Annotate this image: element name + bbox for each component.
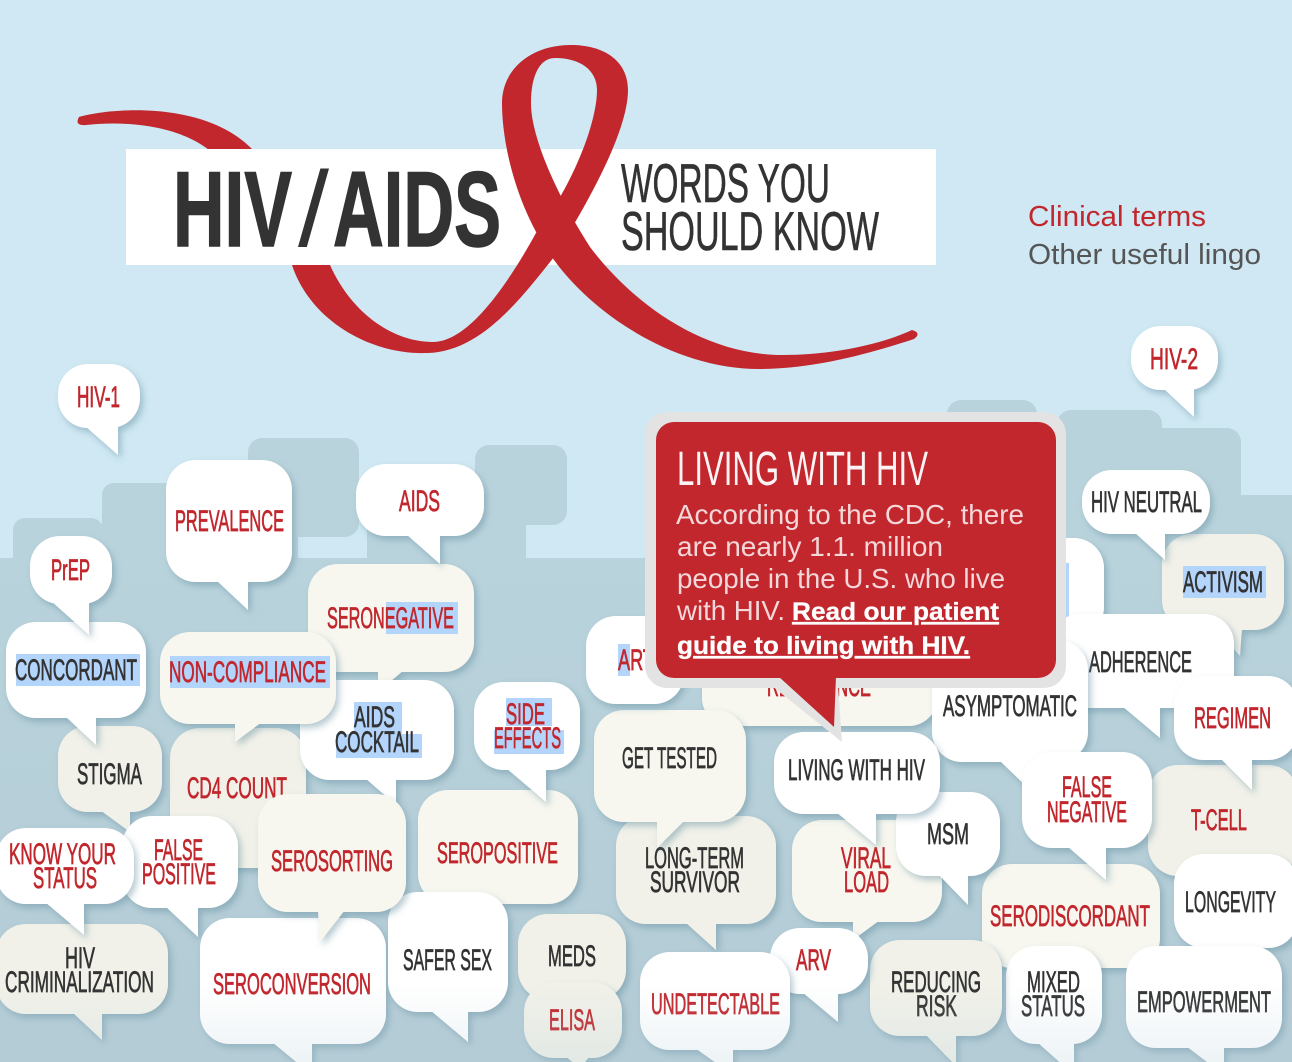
bubble: hidden term behind callout	[1000, 538, 1104, 637]
callout heading: LIVING WITH HIV	[677, 443, 928, 496]
bubble: living with HIV	[774, 732, 940, 845]
bubble: reducing risk	[870, 940, 1002, 1062]
bubble: seronegative: SERONEGATIVE	[327, 602, 454, 635]
bubble: ARV	[770, 928, 868, 1022]
background skyline	[0, 400, 1292, 1062]
bubble: ELISA: ELISA	[549, 1004, 595, 1037]
ribbon loop and lower left strand	[292, 45, 628, 353]
bubble: serodiscordant: SERODISCORDANT	[990, 900, 1150, 933]
bubble: adherence	[1050, 614, 1234, 738]
bubble: false negative: NEGATIVE	[1047, 796, 1127, 829]
bubble: serosorting: SEROSORTING	[271, 845, 393, 878]
bubble: mixed status	[1006, 946, 1102, 1062]
bubble: HIV-1	[58, 364, 140, 455]
bubble: long-term survivor: LONG-TERM	[645, 842, 744, 875]
bubble: HIV-2: HIV-2	[1150, 343, 1198, 376]
bubble: asymptomatic	[932, 640, 1088, 790]
callout frame and tail	[645, 412, 1066, 742]
bubble: concordant: CONCORDANT	[15, 654, 137, 687]
bubble: asymptomatic: ASYMPTOMATIC	[943, 690, 1077, 723]
bubble: get tested: GET TESTED	[622, 742, 717, 775]
bubble: HIV-2	[1131, 326, 1218, 417]
bubble: false negative	[1022, 752, 1152, 880]
callout body text	[676, 499, 1024, 626]
bubble: serosorting	[258, 794, 406, 942]
callout body text: According to the CDC, there	[676, 499, 1024, 530]
bubble: living with HIV: LIVING WITH HIV	[788, 754, 925, 787]
bubble: side effects: SIDE	[506, 698, 545, 731]
bubble: seroconversion: SEROCONVERSION	[213, 968, 371, 1001]
bubble: CD4 count: CD4 COUNT	[187, 772, 287, 805]
legend: Clinical terms	[1028, 201, 1206, 233]
callout panel and tail	[656, 422, 1056, 727]
bubble: seronegative	[308, 564, 474, 692]
bubble: regimen	[1174, 676, 1292, 790]
callout body text: are nearly 1.1. million	[677, 531, 943, 562]
title banner	[126, 149, 936, 265]
bubble: AIDS cocktail: COCKTAIL	[335, 726, 419, 759]
bubble: adherence: ADHERENCE	[1089, 646, 1192, 679]
bubble: PrEP	[30, 536, 112, 635]
bubble: empowerment	[1126, 946, 1282, 1062]
bubble: AIDS cocktail: AIDS	[354, 701, 395, 734]
bubble: HIV criminalization: CRIMINALIZATION	[5, 966, 154, 999]
bubble: undetectable: UNDETECTABLE	[651, 988, 780, 1021]
bubble: concordant	[6, 622, 146, 745]
bubble: false positive	[122, 816, 238, 937]
bubble: reducing risk: RISK	[916, 990, 957, 1023]
bubble: safer sex	[388, 892, 508, 1042]
bubble: MSM: MSM	[927, 818, 969, 851]
bubble: HIV criminalization: HIV	[65, 942, 95, 975]
ribbon left tail	[78, 110, 253, 150]
bubble: know your status	[0, 828, 134, 935]
bubble: activism	[1162, 534, 1284, 656]
bubble: MSM	[896, 792, 1000, 905]
bubble: AIDS cocktail	[300, 680, 454, 805]
bubble: mixed status: STATUS	[1021, 990, 1085, 1023]
title: HIV/AIDS	[173, 149, 501, 269]
bubble: undetectable	[640, 952, 790, 1062]
bubble: stigma: STIGMA	[77, 758, 142, 791]
title logo with ribbon	[78, 45, 936, 369]
bubble: HIV-1: HIV-1	[77, 381, 120, 414]
bubble: viral load: VIRAL	[841, 842, 891, 875]
callout body text: people in the U.S. who live	[677, 563, 1005, 594]
bubble: false positive: POSITIVE	[142, 858, 216, 891]
bubble: prevalence	[166, 460, 292, 610]
bubble: ARV: ARV	[796, 944, 831, 977]
legend	[1028, 201, 1261, 271]
bubble: meds	[518, 914, 626, 1000]
title: HIV/AIDS: AIDS	[333, 149, 501, 269]
callout: living with HIV	[645, 412, 1066, 742]
bubble: T-cell	[1148, 765, 1292, 876]
bubble: side effects: EFFECTS	[494, 722, 561, 755]
bubble: stigma	[58, 726, 162, 832]
bubble: AIDS: AIDS	[399, 485, 440, 518]
bubble: HIV neutral	[1082, 470, 1210, 560]
bubble: AIDS	[356, 464, 484, 564]
bubble: viral load	[792, 820, 942, 940]
bubble: non-compliance: NON-COMPLIANCE	[169, 656, 326, 689]
bubble: longevity	[1174, 854, 1292, 948]
bubble: CD4 count	[170, 728, 306, 868]
bubble: ELISA	[524, 982, 622, 1062]
bubble: seropositive: SEROPOSITIVE	[437, 837, 558, 870]
bubble: viral load: LOAD	[844, 866, 889, 899]
bubble: get tested	[594, 710, 746, 848]
bubble: non-compliance	[160, 632, 336, 742]
bubble: false negative: FALSE	[1062, 771, 1112, 804]
callout body text: with HIV.	[676, 595, 785, 626]
bubble: side effects	[474, 682, 580, 802]
bubble: reducing risk: REDUCING	[891, 966, 981, 999]
subtitle line 1: WORDS YOU	[621, 152, 830, 214]
bubble: seroconversion	[200, 918, 386, 1062]
bubble: false positive: FALSE	[154, 834, 203, 867]
bubble: HIV criminalization	[0, 924, 168, 1040]
bubble: seropositive	[418, 790, 578, 904]
bubble: safer sex: SAFER SEX	[403, 944, 492, 977]
bubble: long-term survivor: SURVIVOR	[650, 866, 740, 899]
title: HIV/AIDS: /	[298, 149, 329, 269]
bottom fade	[0, 985, 1292, 1062]
bubble: prevalence: PREVALENCE	[175, 505, 284, 538]
bubble: long-term survivor	[616, 816, 776, 950]
legend: Other useful lingo	[1028, 239, 1261, 271]
bubble: PrEP: PrEP	[51, 554, 90, 587]
bubble: resistance, partly hidden	[702, 650, 937, 726]
callout link text	[677, 598, 1000, 660]
bubble: ART	[586, 616, 684, 704]
callout link text: guide to living with HIV.	[677, 632, 970, 660]
bubble: mixed status: MIXED	[1027, 966, 1080, 999]
bubble: ART: ART	[618, 644, 654, 677]
bubble: T-cell: T-CELL	[1191, 804, 1247, 837]
bubble: know your status: STATUS	[33, 862, 97, 895]
bubble: resistance, partly hidden: RESISTANCE	[767, 670, 871, 703]
ribbon strand to lower right tail	[502, 103, 918, 369]
bubble: HIV neutral: HIV NEUTRAL	[1091, 486, 1202, 519]
bubble: know your status: KNOW YOUR	[9, 838, 116, 871]
bubble: meds: MEDS	[548, 940, 596, 973]
title: HIV/AIDS: HIV	[173, 149, 292, 269]
subtitle line 2: SHOULD KNOW	[621, 200, 879, 262]
callout link text: Read our patient	[792, 598, 1000, 626]
bubble: serodiscordant	[982, 864, 1160, 968]
